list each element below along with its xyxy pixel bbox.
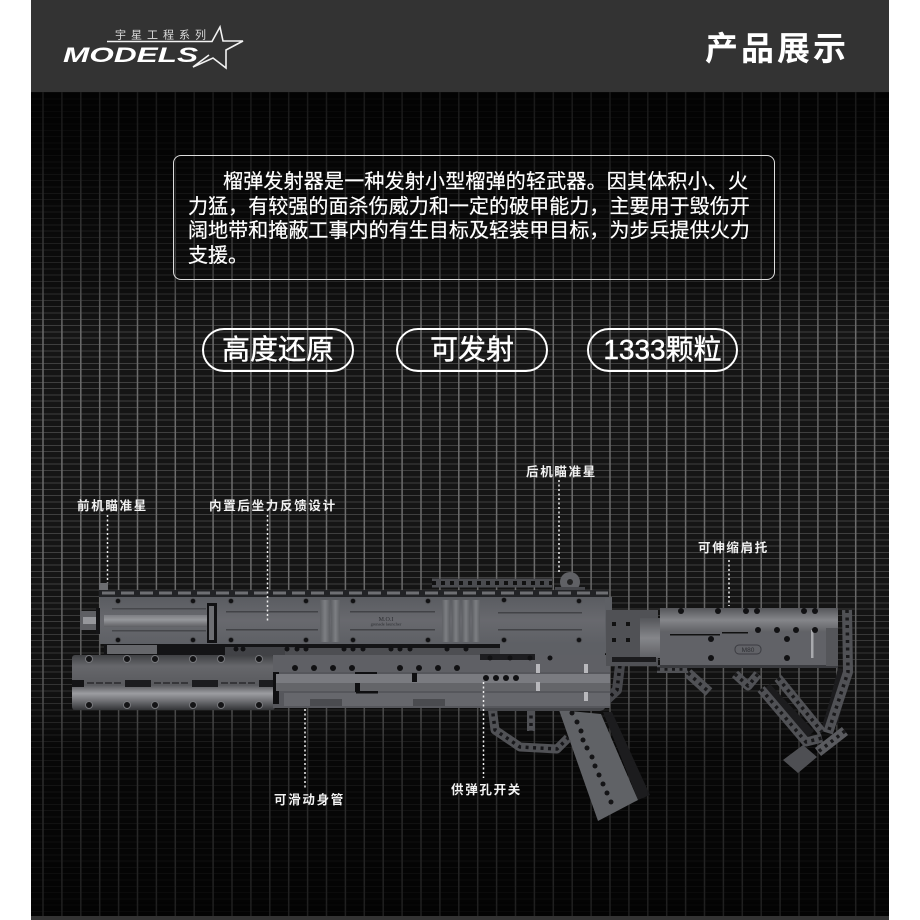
- description line 3: 阔地带和掩蔽工事内的有生目标及轻装甲目标，为步兵提供火力: [188, 220, 750, 242]
- logo: 宇星工程系列: [115, 26, 206, 42]
- description line 1: 榴弹发射器是一种发射小型榴弹的轻武器。因其体积小、火: [223, 171, 748, 193]
- feature pill: can fire: 可发射: [430, 334, 514, 365]
- receiver engraving: M.O.I: [379, 617, 393, 623]
- callout: telescopic stock: 可伸缩肩托: [698, 537, 769, 556]
- telescopic stock body: [660, 608, 838, 668]
- upper receiver: [100, 597, 612, 656]
- receiver ribs: [320, 600, 480, 642]
- callout: front sight: 前机瞄准星: [77, 495, 148, 514]
- front sight block: [99, 583, 108, 595]
- callout: sliding barrel: 可滑动身管: [274, 789, 345, 808]
- feature pill: high fidelity: 高度还原: [222, 334, 334, 365]
- top rail: [99, 590, 609, 597]
- callout: feed port switch: 供弹孔开关: [451, 779, 522, 798]
- feature pill: can fire: [396, 328, 548, 372]
- logo: [63, 24, 244, 70]
- receiver engraving: grenade launcher: [371, 622, 402, 626]
- handguard and lower receiver: [273, 654, 610, 708]
- logo: MODELS: [63, 44, 198, 67]
- receiver engraving: [371, 617, 402, 626]
- feature pill: 1333 pieces: 1333颗粒: [603, 334, 722, 365]
- butt stock struts: [657, 610, 850, 773]
- receiver pin holes: [115, 597, 582, 643]
- callout: internal recoil: 内置后坐力反馈设计: [209, 495, 337, 514]
- title: 产品展示: [705, 22, 849, 70]
- header bar: [31, 0, 889, 92]
- description line 2: 力猛，有较强的面杀伤威力和一定的破甲能力，主要用于毁伤开: [188, 196, 750, 218]
- description panel: [173, 155, 775, 280]
- callout: rear sight: 后机瞄准星: [526, 461, 597, 480]
- stock connector: [606, 610, 660, 666]
- magazine: [559, 710, 650, 821]
- feature pill: 1333 pieces: [587, 328, 738, 372]
- stock badge text: M80: [742, 647, 755, 654]
- sliding barrel tube: [72, 655, 275, 710]
- under receiver band: [104, 644, 500, 656]
- trigger guard links: [480, 665, 620, 749]
- feature pill: high fidelity: [202, 328, 354, 372]
- muzzle: [80, 608, 101, 634]
- description line 4: 支援。: [188, 245, 248, 267]
- front receiver panel: [104, 603, 217, 643]
- rear sight and top rail links: [432, 572, 585, 593]
